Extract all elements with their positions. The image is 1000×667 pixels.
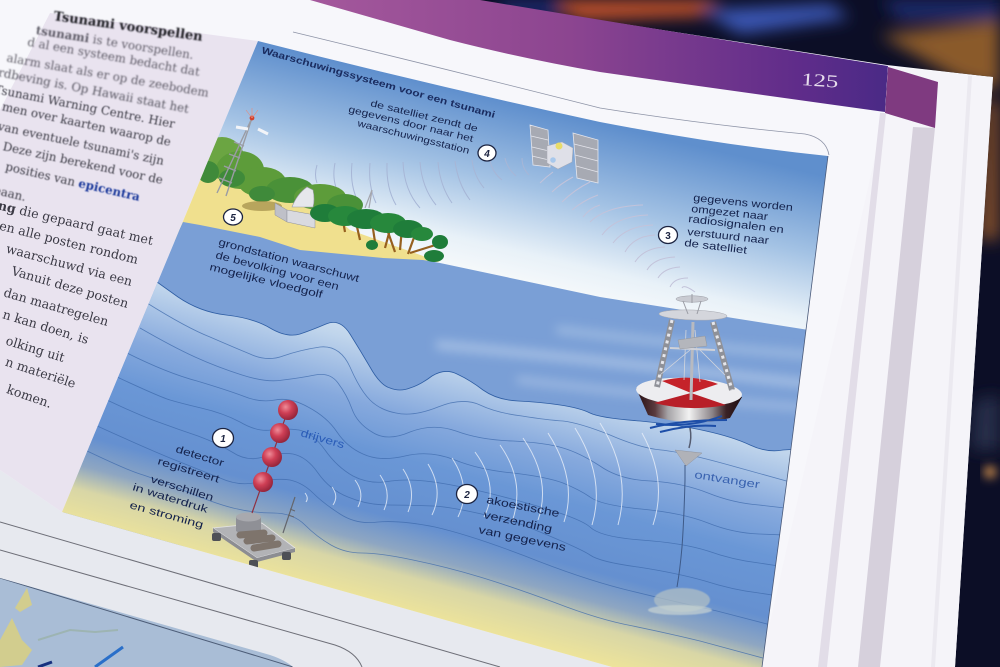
step 3 caption: de satelliet — [684, 237, 748, 257]
body text column: alarm slaat als er op de zeebodem — [6, 51, 210, 100]
step 1 caption: registreert — [156, 455, 221, 486]
step 3 caption — [684, 192, 794, 257]
step 4 caption: waarschuwingsstation — [355, 118, 471, 157]
stacked pages edge — [760, 66, 993, 667]
panel right edge — [762, 156, 828, 667]
step 4 marker: 4 — [483, 149, 490, 160]
step 2 caption: akoestische — [485, 494, 560, 520]
acoustic signal arcs — [305, 423, 658, 525]
step 2 marker: 2 — [463, 490, 470, 501]
step 3 caption: verstuurd naar — [687, 226, 770, 247]
buoy platforms — [658, 310, 728, 320]
heading: tsunami voorspellen: Tsunami voorspellen — [53, 9, 204, 45]
body text lower paragraph: ng die gepaard gaat met — [0, 198, 155, 248]
page number: 125 — [801, 69, 839, 92]
label: ontvanger: ontvanger — [694, 469, 761, 491]
signal arcs buoy to satellite — [540, 172, 695, 292]
instrument box — [678, 336, 707, 349]
step 3 caption: radiosignalen en — [688, 213, 785, 236]
step 4 marker — [478, 145, 496, 161]
step 4 caption — [347, 98, 479, 157]
sea surface band — [63, 222, 806, 546]
logs — [240, 533, 278, 548]
step 4 caption: gegevens door naar het — [347, 104, 475, 145]
map on lower panel — [0, 578, 293, 667]
step 3 caption: gegevens worden — [693, 192, 794, 214]
body text lower paragraph: olking uit — [4, 333, 67, 365]
beach — [170, 172, 440, 262]
step 2 caption: verzending — [482, 509, 553, 535]
buoy hull — [636, 388, 742, 422]
palm trees — [310, 204, 448, 262]
buoy — [635, 294, 743, 448]
step 5 caption: grondstation waarschuwt — [217, 236, 361, 285]
illustration panel — [40, 30, 850, 667]
body text lower paragraph: waarschuwd via een — [5, 241, 134, 289]
step 5 caption — [208, 236, 361, 301]
body text column: tsunami is te voorspellen. — [35, 23, 195, 62]
radio mast with warning light — [217, 108, 268, 196]
step 3 marker: 3 — [665, 231, 671, 242]
chain — [689, 428, 691, 448]
step 1 marker: 1 — [220, 434, 226, 445]
diagram title: Waarschuwingssysteem voor een tsunami — [260, 45, 496, 121]
body text lower paragraph — [0, 198, 155, 411]
mast — [283, 497, 295, 533]
body text lower paragraph: en alle posten rondom — [0, 218, 140, 267]
step 1 caption: verschillen — [149, 473, 215, 504]
ground station with dish — [242, 187, 315, 228]
receiver cone and cable — [675, 450, 702, 587]
step 1 caption: en stroming — [128, 499, 205, 531]
small antenna — [365, 190, 372, 208]
detector platform — [212, 410, 295, 569]
signal arcs satellite to ground station — [316, 158, 529, 208]
body text column: d al een systeem bedacht dat — [26, 35, 201, 79]
step 2 caption — [477, 494, 568, 554]
seabed anchor rock — [648, 588, 712, 615]
label: drijvers: drijvers — [299, 427, 346, 451]
step 5 marker — [224, 209, 242, 225]
step 4 caption: de satelliet zendt de — [369, 98, 479, 135]
sky — [211, 41, 828, 330]
cylinder — [236, 518, 261, 532]
step 3 caption: omgezet naar — [691, 203, 769, 223]
step 5 marker: 5 — [230, 213, 236, 224]
body text lower paragraph: komen. — [5, 381, 54, 411]
drijvers floats — [253, 400, 298, 492]
step 1 caption: in waterdruk — [131, 481, 210, 516]
step 1 caption — [128, 443, 226, 531]
step 5 caption: de bevolking voor een — [214, 249, 340, 293]
satellite — [530, 125, 598, 183]
body text lower paragraph: n materiële — [4, 354, 78, 391]
body text lower paragraph: dan maatregelen — [2, 285, 110, 329]
step 1 marker — [212, 428, 234, 448]
body text column — [0, 9, 210, 411]
step 2 caption: van gegevens — [477, 524, 568, 554]
body text column: Deze zijn berekend voor de — [2, 139, 164, 187]
underwater — [40, 282, 815, 667]
body text lower paragraph: n kan doen, is — [1, 306, 91, 347]
lavender text column — [0, 13, 258, 512]
step 2 marker — [456, 484, 478, 504]
island trees — [197, 137, 363, 216]
panel frame line — [293, 32, 829, 155]
dark photo background — [450, 0, 1000, 667]
ripples — [650, 416, 727, 432]
step 5 caption: mogelijke vloedgolf — [208, 261, 324, 301]
body text column: posities van epicentra — [4, 159, 142, 204]
step 3 marker — [658, 226, 678, 244]
step 1 caption: detector — [174, 443, 226, 470]
page 125 purple header band — [310, 0, 888, 112]
body text lower paragraph: Vanuit deze posten — [9, 263, 130, 311]
depth contour lines — [85, 303, 790, 660]
sea light stripes — [440, 330, 810, 408]
bottom page band with ruled lines — [0, 470, 612, 667]
tether — [252, 419, 286, 514]
buoy wires and pillars — [657, 320, 732, 400]
